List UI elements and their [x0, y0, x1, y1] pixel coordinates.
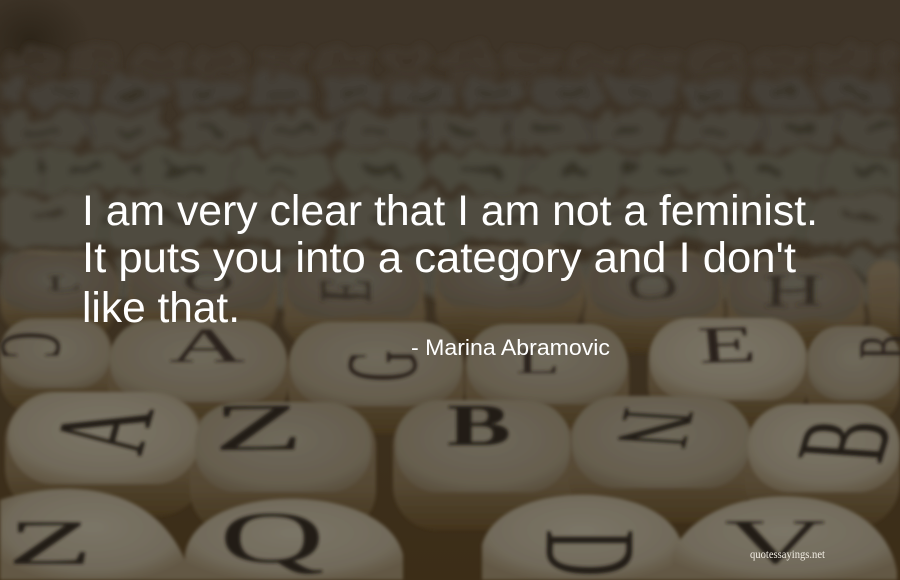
upper row letters: J: [501, 259, 539, 296]
upper row letters: L: [45, 269, 79, 296]
middle row letters: E: [695, 315, 759, 374]
upper row letters: O: [183, 267, 233, 298]
middle row letters: [0, 315, 900, 381]
attribution: - Marina Abramovic: [411, 335, 610, 360]
bottom row letters: [7, 497, 826, 578]
upper row letters: E: [303, 280, 386, 302]
quote text: like that.: [82, 284, 240, 332]
bottom row letters: Q: [219, 497, 325, 578]
near row letters: N: [594, 405, 718, 451]
bottom row letters: Z: [7, 508, 93, 578]
bottom row letters: D: [518, 530, 662, 576]
quote text: I am very clear that I am not a feminist.: [82, 187, 818, 235]
upper row letters: O: [626, 264, 678, 308]
far rows of blurred blocks: [0, 48, 900, 308]
bottom row letters: V: [724, 507, 826, 577]
upper row letters: [45, 259, 821, 315]
near row letters: B: [447, 393, 511, 458]
quote text: [82, 187, 818, 332]
bottom row of blocks: [0, 489, 897, 580]
watermark: quotessayings.net: [750, 547, 826, 561]
near row letters: A: [24, 401, 183, 459]
upper row letters: H: [763, 266, 821, 315]
middle row letters: L: [516, 341, 560, 381]
near row letters: Z: [211, 390, 305, 464]
middle row letters: A: [169, 318, 245, 372]
middle row letters: G: [325, 351, 438, 381]
upper row of blocks: [0, 246, 900, 352]
near row letters: [24, 390, 900, 467]
middle row of blocks: [0, 318, 900, 434]
quote text: It puts you into a category and I don't: [82, 234, 796, 282]
near row of blocks: [5, 392, 900, 534]
